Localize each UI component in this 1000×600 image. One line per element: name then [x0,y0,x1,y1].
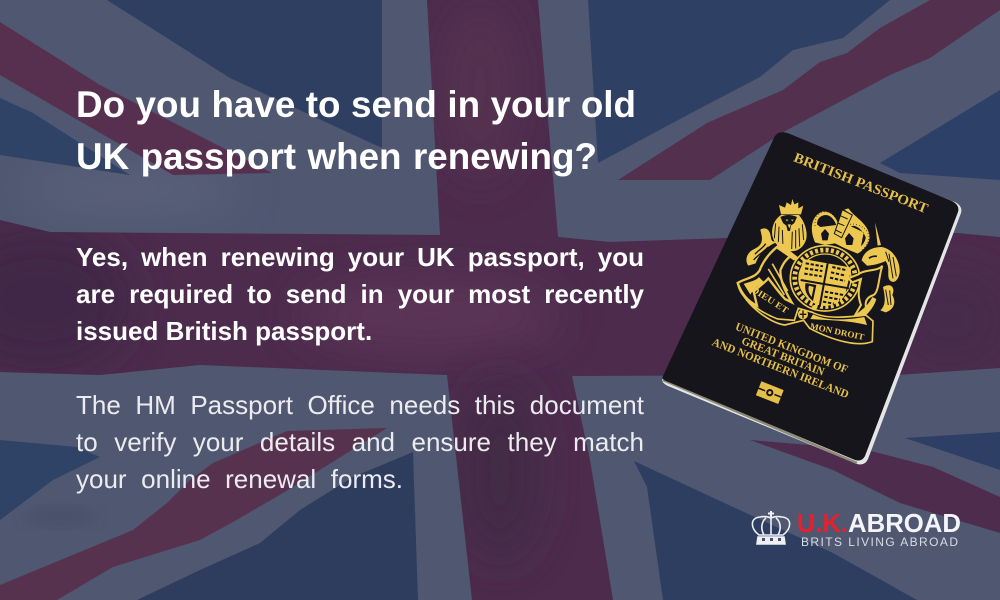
motto text: DIEU ET [750,284,790,315]
passport: country name: AND NORTHERN IRELAND [710,336,850,401]
answer: bold paragraph [76,242,644,346]
flag: soft fold shadow [26,510,94,524]
crest: unicorn [848,222,900,323]
answer: bold paragraph: Yes, when renewing your UK passport, you [76,242,644,272]
flag: blue canton far right [880,90,1000,180]
flag: diagonal red upper right [618,0,1000,180]
crest: motto ribbon: MON DROIT [809,321,865,342]
title: Do you have to send in your old [76,84,636,125]
crest: shield and garter [790,246,860,311]
flag: blue canton bottom centre [137,452,418,600]
passport: page edges [662,133,961,464]
answer: bold paragraph: are required to send in your most recently [76,279,644,309]
explanation paragraph: The HM Passport Office needs this document [76,390,644,420]
logo: U.K. Abroad: ABROAD [848,508,961,538]
title [76,84,636,177]
flag: blue canton top right [588,0,890,163]
flag: blue canton right edge [905,432,1000,470]
flag: light shading on white stripes [20,164,240,216]
explanation paragraph [76,390,644,494]
answer: bold paragraph: issued British passport. [76,316,372,346]
flag: diagonal red lower right [750,440,1000,533]
explanation paragraph: to verify your details and ensure they match [76,427,644,457]
logo: U.K. Abroad [752,508,961,549]
passport: cover [662,132,958,460]
passport [662,132,961,464]
passport: country name: UNITED KINGDOM OF [733,321,849,376]
passport: biometric chip symbol [756,381,784,404]
title: UK passport when renewing? [76,136,597,177]
flag: cross shading [0,52,542,522]
passport title: BRITISH PASSPORT [791,151,931,217]
passport: cover text [700,148,931,429]
flag: blue canton bottom right [634,461,917,600]
passport: royal coat of arms [738,199,900,344]
logo crown icon [752,511,790,544]
flag: blue canton bottom left edge [0,440,100,520]
flag: blue canton far left [0,98,130,175]
explanation paragraph: your online renewal forms. [76,464,403,494]
flag: diagonal red upper left [0,22,272,175]
logo tagline: BRITS LIVING ABROAD [801,535,958,549]
crest: motto ribbon [738,283,873,344]
passport: country name: GREAT BRITAIN [740,335,827,379]
passport: bottom page edge [663,380,857,463]
logo wordmark: U.K. [797,508,848,538]
flag: blue canton top left [107,0,382,148]
crest: royal crown and orb [812,208,870,254]
flag: diagonal red lower left [0,428,387,600]
crest: lion [738,199,807,306]
